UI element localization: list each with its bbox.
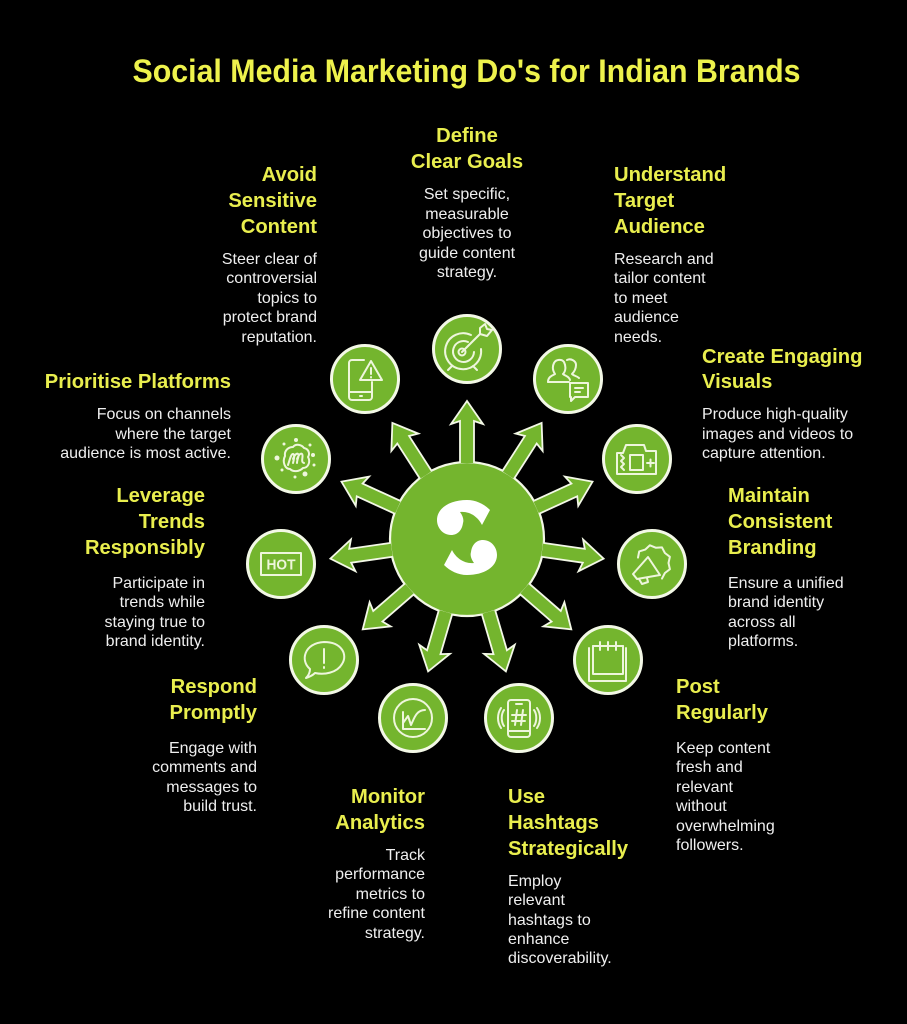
text block: Understand Target Audience: Audience [614, 216, 705, 238]
icon: calendar [574, 626, 642, 694]
text block: Leverage Trends Responsibly: trends while [120, 594, 205, 611]
text block: Maintain Consistent Branding: Branding [728, 537, 817, 559]
text block: Post Regularly: relevant [676, 779, 733, 796]
text block: Monitor Analytics: Track [386, 847, 426, 864]
icon: hot sign [248, 530, 314, 598]
text block: Post Regularly: overwhelming [676, 818, 775, 835]
text block: Avoid Sensitive Content: reputation. [241, 329, 317, 346]
arrow: to Use Hashtags Strategically [473, 607, 521, 676]
text block: Use Hashtags Strategically: relevant [508, 892, 565, 909]
text block: Post Regularly: fresh and [676, 759, 743, 776]
text block: Define Clear Goals: objectives to [423, 225, 512, 242]
text block: Prioritise Platforms [45, 371, 232, 462]
text block: Create Engaging Visuals: Produce high-quality [702, 406, 848, 423]
icon: phone with hashtag [486, 684, 552, 752]
text block: Use Hashtags Strategically [508, 786, 629, 967]
text block: Define Clear Goals: guide content [419, 245, 516, 262]
icon: phone alert [332, 346, 398, 412]
icon: camera [604, 426, 670, 492]
icon: m badge [262, 426, 330, 492]
text block: Leverage Trends Responsibly [85, 485, 206, 650]
text block: Maintain Consistent Branding: Consistent [728, 511, 833, 533]
text block: Maintain Consistent Branding: Ensure a unified [728, 575, 844, 592]
text block: Avoid Sensitive Content [222, 164, 318, 346]
text block: Avoid Sensitive Content: Content [241, 216, 317, 238]
text block: Use Hashtags Strategically: Use [508, 786, 545, 808]
arrow: to Leverage Trends Responsibly [328, 534, 394, 574]
text block: Leverage Trends Responsibly: Responsibly [85, 537, 206, 559]
central hub [390, 462, 544, 616]
text block: Post Regularly: Keep content [676, 740, 771, 757]
text block: Respond Promptly: Engage with [169, 740, 257, 757]
text block: Avoid Sensitive Content: topics to [257, 290, 317, 307]
text block: Define Clear Goals: strategy. [437, 264, 497, 281]
text block: Understand Target Audience: Research and [614, 251, 714, 268]
text block: Use Hashtags Strategically: discoverability. [508, 950, 612, 967]
text block: Leverage Trends Responsibly: Participate in [112, 575, 205, 592]
text block: Leverage Trends Responsibly: staying true to [104, 614, 205, 631]
text block: Maintain Consistent Branding: across all [728, 614, 796, 631]
text block: Monitor Analytics: refine content [328, 905, 426, 922]
text block: Understand Target Audience [614, 164, 726, 346]
text block: Respond Promptly [152, 676, 258, 815]
text block: Create Engaging Visuals: Create Engaging [702, 346, 862, 368]
text block: Define Clear Goals: Set specific, [424, 186, 510, 203]
icon: central logo [437, 500, 497, 575]
text block: Define Clear Goals: measurable [425, 206, 509, 223]
text block: Post Regularly [675, 676, 775, 854]
title: Social Media Marketing Do's for Indian Brands [132, 53, 800, 89]
text block: Leverage Trends Responsibly: brand identity. [106, 633, 205, 650]
text block: Monitor Analytics: strategy. [365, 925, 425, 942]
arrow: to Post Regularly [514, 577, 582, 641]
text block: Create Engaging Visuals [702, 346, 862, 462]
text block: Understand Target Audience: tailor content [614, 270, 706, 287]
text block: Prioritise Platforms: Focus on channels [97, 406, 231, 423]
text block: Respond Promptly: messages to [166, 779, 257, 796]
text block: Use Hashtags Strategically: Hashtags [508, 812, 599, 834]
arrow: to Understand Target Audience [495, 414, 555, 484]
text block: Respond Promptly: Respond [171, 676, 257, 698]
text block: Avoid Sensitive Content: protect brand [223, 309, 317, 326]
arrow: to Avoid Sensitive Content [379, 414, 439, 484]
text block: Define Clear Goals [411, 125, 523, 281]
text block: Maintain Consistent Branding: platforms. [728, 633, 798, 650]
text block: Create Engaging Visuals: images and videos to [702, 426, 853, 443]
text block: Use Hashtags Strategically: Strategically [508, 838, 629, 860]
text block: Define Clear Goals: Define [436, 125, 498, 147]
text block: Monitor Analytics: metrics to [356, 886, 425, 903]
text block: Respond Promptly: comments and [152, 759, 257, 776]
text block: Maintain Consistent Branding [728, 485, 844, 650]
text block: Post Regularly: Regularly [676, 702, 769, 724]
text block: Monitor Analytics [328, 786, 426, 942]
text block: Prioritise Platforms: audience is most active. [60, 445, 231, 462]
text block: Use Hashtags Strategically: hashtags to [508, 912, 591, 929]
text block: Understand Target Audience: Understand [614, 164, 726, 186]
text block: Respond Promptly: Promptly [170, 702, 258, 724]
text block: Leverage Trends Responsibly: Trends [139, 511, 205, 533]
text block: Post Regularly: followers. [676, 837, 744, 854]
text block: Create Engaging Visuals: Visuals [702, 371, 772, 393]
text block: Create Engaging Visuals: capture attention. [702, 445, 826, 462]
text block: Prioritise Platforms: where the target [114, 426, 232, 443]
arrow: to Respond Promptly [352, 577, 420, 641]
text block: Understand Target Audience: to meet [614, 290, 668, 307]
arrow: to Monitor Analytics [413, 607, 461, 676]
text block: Avoid Sensitive Content: Avoid [262, 164, 317, 186]
icon: speech alert [290, 626, 358, 694]
text block: Use Hashtags Strategically: enhance [508, 931, 569, 948]
arrow: to Define Clear Goals [451, 401, 483, 463]
icon: hot sign: HOT [266, 556, 296, 574]
icon: target [434, 316, 500, 382]
text block: Define Clear Goals: Clear Goals [411, 151, 523, 173]
text block: Avoid Sensitive Content: controversial [226, 270, 317, 287]
text block: Maintain Consistent Branding: brand identity [728, 594, 824, 611]
arrow: to Prioritise Platforms [335, 467, 405, 522]
text block: Avoid Sensitive Content: Steer clear of [222, 251, 318, 268]
text block: Monitor Analytics: Monitor [351, 786, 425, 808]
text block: Post Regularly: Post [676, 676, 720, 698]
text block: Understand Target Audience: audience [614, 309, 679, 326]
text block: Prioritise Platforms: Prioritise Platforms [45, 371, 231, 393]
icon: audience with chat [534, 346, 602, 412]
text block: Understand Target Audience: Target [614, 190, 674, 212]
text block: Leverage Trends Responsibly: Leverage [116, 485, 205, 507]
text block: Respond Promptly: build trust. [183, 798, 257, 815]
text block: Monitor Analytics: Analytics [335, 812, 425, 834]
text block: Understand Target Audience: needs. [614, 329, 662, 346]
text block: Use Hashtags Strategically: Employ [508, 873, 561, 890]
text block: Avoid Sensitive Content: Sensitive [228, 190, 317, 212]
text block: Monitor Analytics: performance [335, 866, 425, 883]
text block: Maintain Consistent Branding: Maintain [728, 485, 810, 507]
text block: Post Regularly: without [675, 798, 727, 815]
icon: megaphone badge [618, 530, 686, 598]
arrow: to Maintain Consistent Branding [540, 534, 606, 574]
icon: analytics chart [380, 684, 446, 752]
arrow: to Create Engaging Visuals [529, 467, 599, 522]
